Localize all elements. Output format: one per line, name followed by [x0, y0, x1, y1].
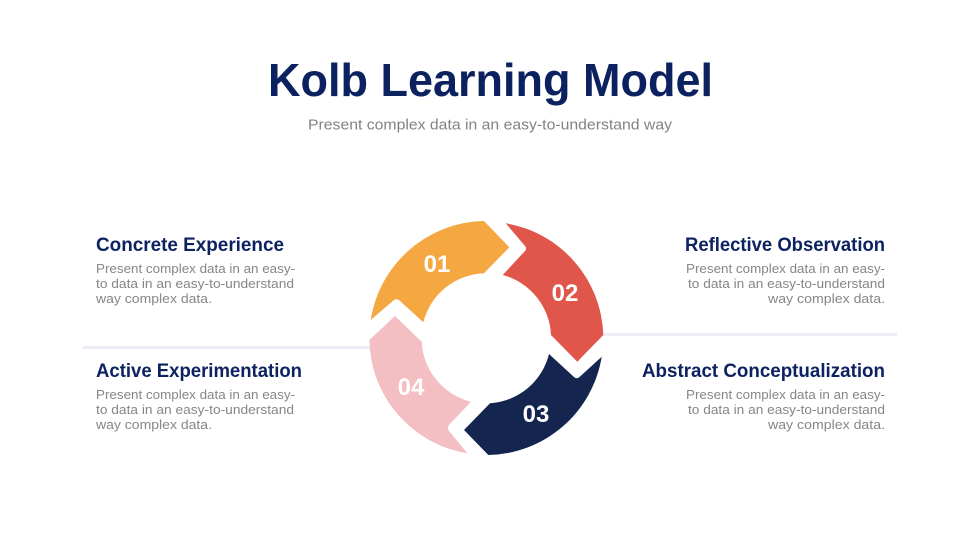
text block: Reflective Observation: way complex data. — [767, 291, 885, 306]
segment 04: pink arrow: 04 — [398, 374, 425, 401]
text block: Abstract Conceptualization — [642, 361, 885, 432]
text block: Active Experimentation: way complex data. — [95, 417, 212, 432]
segment 01: orange arrow — [371, 221, 509, 322]
text block: Active Experimentation: Active Experimentation — [96, 361, 302, 382]
text block: Abstract Conceptualization: way complex data. — [767, 417, 885, 432]
text block: Concrete Experience — [95, 235, 295, 306]
text block: Abstract Conceptualization: to data in an easy-to-understand — [688, 402, 885, 417]
text block: Active Experimentation: to data in an easy-to-understand — [96, 402, 294, 417]
segment 03: navy arrow: 03 — [523, 401, 549, 428]
subtitle: Present complex data in an easy-to-understand way — [308, 116, 673, 134]
text block: Concrete Experience: way complex data. — [95, 291, 212, 306]
text block: Abstract Conceptualization: Present complex data in an easy- — [686, 387, 885, 402]
segment 04: pink arrow — [369, 316, 471, 453]
text block: Active Experimentation — [95, 361, 302, 432]
text block: Active Experimentation: Present complex data in an easy- — [96, 387, 295, 402]
text block: Reflective Observation — [685, 235, 885, 306]
text block: Reflective Observation: to data in an easy-to-understand — [688, 276, 885, 291]
text block: Abstract Conceptualization: Abstract Conceptualization — [642, 361, 885, 382]
text block: Concrete Experience: to data in an easy-to-understand — [96, 276, 294, 291]
text block: Reflective Observation: Present complex data in an easy- — [686, 261, 885, 276]
segment 01: orange arrow: 01 — [424, 251, 450, 278]
segment 02: red arrow: 02 — [552, 280, 578, 307]
segment 03: navy arrow — [464, 354, 602, 455]
text block: Concrete Experience: Concrete Experience — [96, 235, 284, 256]
cycle diagram — [369, 221, 603, 455]
text block: Reflective Observation: Reflective Observation — [685, 235, 885, 256]
title: Kolb Learning Model — [268, 54, 713, 106]
segment 02: red arrow — [503, 223, 603, 362]
text block: Concrete Experience: Present complex data in an easy- — [96, 261, 295, 276]
